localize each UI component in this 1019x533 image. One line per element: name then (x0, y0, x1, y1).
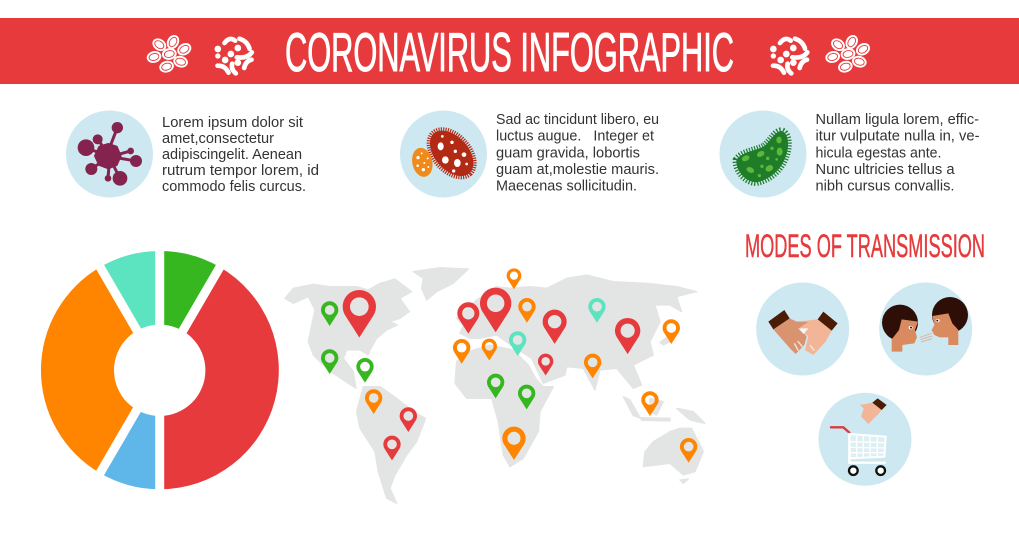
donut chart (41, 245, 279, 495)
icon: purple virus (66, 110, 153, 198)
text block 2: Sad ac tincidunt libero, eu (496, 112, 659, 128)
panel: bacteria intro (400, 110, 659, 198)
text block 1: commodo felis curcus. (162, 179, 306, 195)
icon: green microbe (720, 110, 806, 198)
world map (285, 268, 705, 503)
text block 2: guam at,molestie mauris. (496, 162, 659, 178)
icon: cell cluster right (824, 33, 872, 74)
text block 3: Nullam ligula lorem, effic- (816, 112, 979, 128)
text block 3: nibh cursus convallis. (816, 179, 954, 195)
text block 3: itur vulputate nulla in, ve- (816, 129, 980, 145)
text block 2: luctus augue. Integer et (496, 129, 654, 145)
text block 2: Maecenas sollicitudin. (496, 179, 637, 195)
map pins (321, 268, 697, 463)
text block 3: hicula egestas ante. (816, 146, 942, 162)
panel: green microbe intro (720, 110, 980, 198)
icon: handshake (756, 282, 849, 376)
panel: virus intro (66, 110, 319, 198)
icon: bacteria cluster left (215, 39, 252, 73)
text block 1: Lorem ipsum dolor sit (162, 115, 303, 131)
icon: bacteria cluster right (770, 39, 807, 73)
text block 1: amet,consectetur (162, 131, 274, 147)
icon: hand and shopping cart (818, 393, 912, 486)
icon: two people talking (879, 282, 972, 376)
text block 1 (162, 115, 319, 195)
text block 1: adipiscingelit. Aenean (162, 147, 302, 163)
title banner (0, 18, 1019, 84)
text block 2 (496, 112, 659, 195)
text block 3 (816, 112, 980, 195)
icon: red and orange bacteria (400, 110, 487, 198)
text block 3: Nunc ultricies tellus a (816, 162, 955, 178)
text block 1: rutrum tempor lorem, id (162, 163, 319, 179)
icon: cell cluster left (145, 33, 194, 74)
text block 2: guam gravida, lobortis (496, 146, 640, 162)
map landmasses (285, 268, 705, 503)
